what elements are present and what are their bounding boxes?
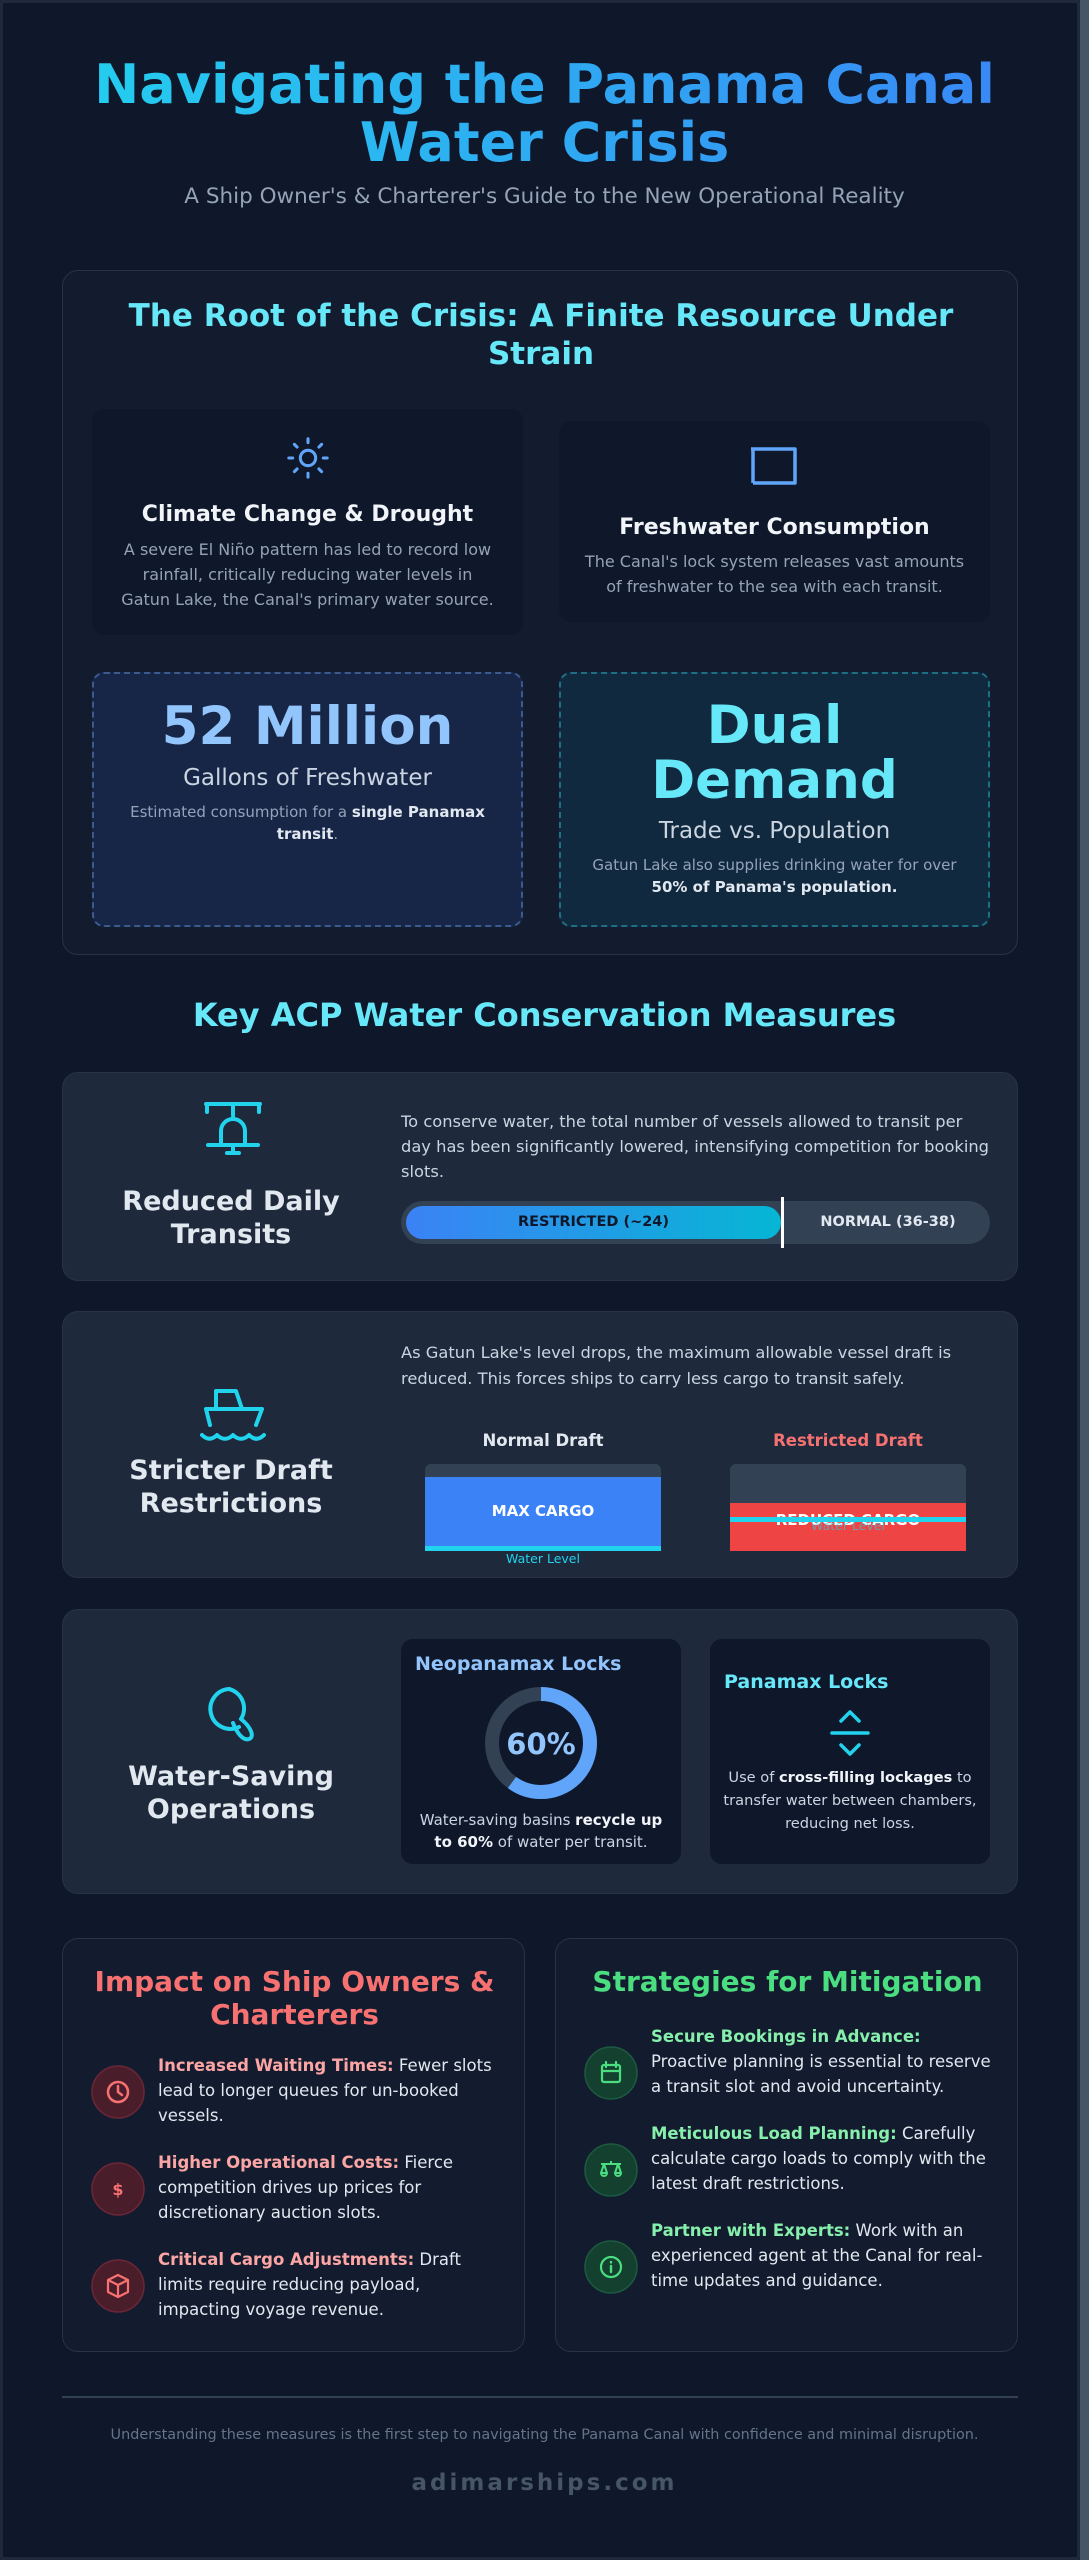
chart: restricted draft: Water Level bbox=[811, 1518, 885, 1533]
stat: dual demand: Trade vs. Population bbox=[659, 818, 890, 844]
donut chart: 60% bbox=[485, 1687, 597, 1799]
bar chart: transits: NORMAL (36-38) bbox=[820, 1214, 956, 1230]
heading: reduced transits: Reduced Daily bbox=[122, 1186, 340, 1217]
card: neopanamax bbox=[401, 1639, 681, 1864]
text: climate: A severe El Niño pattern has led to record low rainfall, critically reducing water levels in Gatun Lake, the Canal's primary water source. bbox=[121, 540, 494, 609]
bar chart: transits: RESTRICTED (~24) bbox=[518, 1214, 669, 1230]
heading: water-saving bbox=[128, 1761, 334, 1825]
item: secure bookings: Secure Bookings in Advance: Proactive planning is essential to reserve a transit slot and avoid uncertainty. bbox=[651, 2027, 991, 2096]
panel: root of the crisis bbox=[62, 270, 1018, 955]
subtitle: A Ship Owner's & Charterer's Guide to the New Operational Reality bbox=[184, 184, 905, 209]
chart: normal draft: Normal Draft bbox=[482, 1431, 604, 1450]
heading: draft bbox=[129, 1455, 333, 1519]
card: climate change bbox=[92, 409, 523, 635]
chart: restricted draft: Restricted Draft bbox=[773, 1431, 923, 1450]
text: freshwater: The Canal's lock system releases vast amounts of freshwater to the sea with each transit. bbox=[585, 552, 964, 596]
panel: water-saving operations bbox=[62, 1609, 1018, 1894]
heading: strategies: Strategies for Mitigation bbox=[592, 1965, 983, 1998]
card: panamax: Panamax Locks bbox=[724, 1671, 888, 1693]
heading: root bbox=[128, 298, 954, 372]
icon: drop bbox=[208, 1687, 254, 1742]
stat: 52 million: 52 Million bbox=[162, 696, 453, 757]
heading: reduced transits bbox=[122, 1186, 340, 1250]
heading: water-saving: Operations bbox=[147, 1794, 315, 1825]
stat: dual demand bbox=[559, 672, 990, 927]
icon: lock gate bbox=[204, 1102, 262, 1155]
heading: root: The Root of the Crisis: A Finite Resource Under bbox=[129, 298, 953, 334]
stat: 52 million bbox=[92, 672, 523, 927]
item: partner with experts: Partner with Experts: Work with an experienced agent at the Canal for real-time updates and guidance. bbox=[651, 2221, 982, 2290]
footer text: Understanding these measures is the first step to navigating the Panama Canal with confidence and minimal disruption. bbox=[111, 2427, 978, 2443]
chart: normal draft bbox=[425, 1431, 661, 1566]
text: draft: As Gatun Lake's level drops, the maximum allowable vessel draft is reduced. This forces ships to carry less cargo to transit safely. bbox=[401, 1343, 951, 1388]
stat: 52 million: Gallons of Freshwater bbox=[183, 765, 432, 791]
chart: normal draft: MAX CARGO bbox=[492, 1502, 594, 1520]
heading: draft: Stricter Draft bbox=[129, 1455, 333, 1486]
card: panamax: Use of cross-filling lockages to transfer water between chambers, reducing net loss. bbox=[723, 1769, 977, 1832]
item: load planning: Meticulous Load Planning: Carefully calculate cargo loads to comply with the latest draft restrictions. bbox=[651, 2124, 986, 2193]
item: cargo adjustments: Critical Cargo Adjustments: Draft limits require reducing payload, impacting voyage revenue. bbox=[158, 2250, 461, 2319]
heading: draft: Restrictions bbox=[140, 1488, 322, 1519]
icon: ship bbox=[200, 1389, 266, 1441]
panel: strategies bbox=[555, 1938, 1018, 2352]
title bbox=[0, 56, 1089, 172]
item: waiting times: Increased Waiting Times: Fewer slots lead to longer queues for un-booked vessels. bbox=[158, 2056, 492, 2125]
card: neopanamax: Water-saving basins recycle up to 60% of water per transit. bbox=[420, 1811, 662, 1851]
icon: sun bbox=[287, 437, 329, 479]
item: operational costs: Higher Operational Costs: Fierce competition drives up prices for discretionary auction slots. bbox=[158, 2153, 453, 2222]
stat: 52 million: Estimated consumption for a single Panamax transit. bbox=[130, 803, 485, 843]
heading: impact: Charterers bbox=[210, 1998, 379, 2031]
footer brand: adimarships.com bbox=[412, 2470, 677, 2496]
stat: dual demand: Gatun Lake also supplies drinking water for over 50% of Panama's population. bbox=[592, 856, 957, 896]
heading: climate: Climate Change & Drought bbox=[142, 502, 473, 527]
heading: root: Strain bbox=[488, 336, 594, 372]
heading: freshwater: Freshwater Consumption bbox=[619, 515, 930, 540]
heading: key ACP measures: Key ACP Water Conservation Measures bbox=[193, 996, 896, 1034]
panel: reduced daily transits bbox=[62, 1072, 1018, 1281]
heading: impact: Impact on Ship Owners & bbox=[95, 1965, 494, 1998]
card: panamax bbox=[710, 1639, 990, 1864]
icon: basin bbox=[751, 447, 797, 485]
panel: impact bbox=[62, 1938, 525, 2352]
chart: restricted draft bbox=[730, 1431, 966, 1551]
text: transits: To conserve water, the total number of vessels allowed to transit per day has been significantly lowered, intensifying competition for booking slots. bbox=[401, 1112, 989, 1181]
donut chart: 60%: 60% bbox=[506, 1727, 576, 1761]
stat: dual demand: Demand bbox=[651, 750, 898, 811]
heading: water-saving: Water-Saving bbox=[128, 1761, 334, 1792]
title: Navigating the Panama Canal bbox=[94, 53, 995, 116]
heading: impact bbox=[95, 1965, 494, 2031]
panel: stricter draft bbox=[62, 1311, 1018, 1578]
card: neopanamax: Neopanamax Locks bbox=[415, 1653, 621, 1675]
card: freshwater consumption bbox=[559, 421, 990, 622]
heading: reduced transits: Transits bbox=[171, 1219, 291, 1250]
stat: dual demand: Dual bbox=[707, 695, 842, 756]
item: operational costs: $ bbox=[112, 2180, 124, 2199]
icon: up-down arrows bbox=[830, 1710, 870, 1756]
chart: normal draft: Water Level bbox=[506, 1551, 580, 1566]
title: Water Crisis bbox=[360, 111, 729, 174]
bar chart: transits bbox=[401, 1201, 990, 1244]
chart: restricted draft: REDUCED CARGO bbox=[776, 1511, 920, 1529]
